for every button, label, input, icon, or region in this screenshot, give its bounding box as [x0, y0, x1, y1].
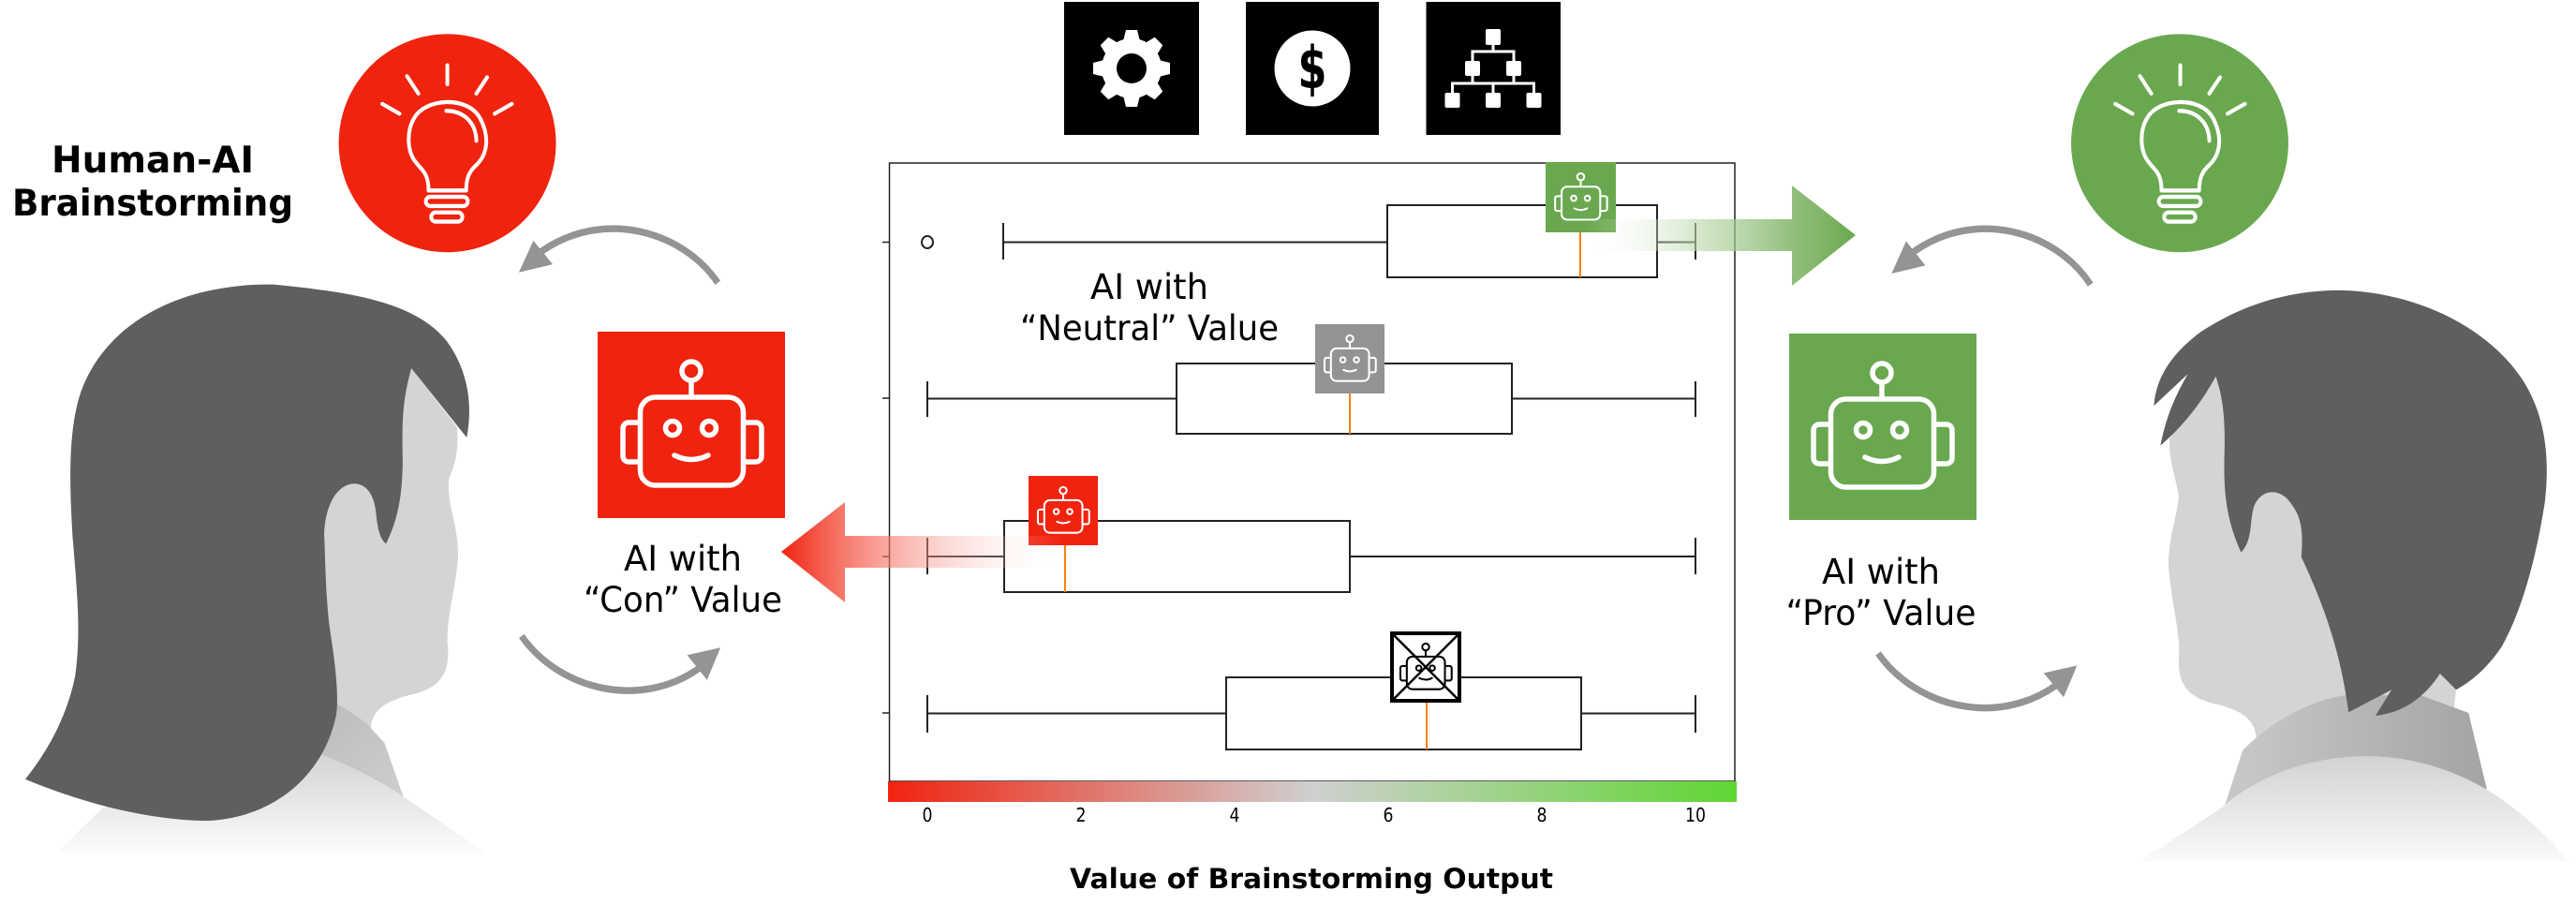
x-axis tick labels: 2 — [1075, 804, 1087, 826]
x-axis tick labels: 6 — [1383, 804, 1394, 826]
icon: small green robot — [1546, 162, 1616, 232]
boxplot: con AI — [927, 521, 1695, 592]
chart frame — [890, 163, 1735, 781]
title: Brainstorming — [12, 183, 293, 225]
label: AI with Con value: “Con” Value — [584, 580, 782, 620]
y-axis ticks — [882, 242, 889, 713]
red idea lightbulb — [339, 34, 556, 252]
x-axis tick labels: 8 — [1536, 804, 1547, 826]
x-axis tick labels: 0 — [922, 804, 933, 826]
arrow: left human to AI — [522, 636, 720, 690]
x-axis tick labels: 10 — [1685, 804, 1706, 826]
label: AI with Pro value — [1785, 552, 1976, 633]
right human figure — [2140, 290, 2569, 861]
label: AI with Pro value: “Pro” Value — [1785, 593, 1976, 633]
icon: dollar: $ — [1298, 34, 1326, 102]
left human figure — [25, 285, 486, 853]
boxplot: neutral AI — [927, 363, 1695, 434]
title — [12, 140, 293, 225]
icon: small grey robot — [1315, 324, 1384, 393]
arrow: shift to negative value — [781, 502, 1065, 602]
icon: hierarchy — [1426, 2, 1561, 135]
boxplot: pro AI — [922, 205, 1695, 277]
x-axis title: Value of Brainstorming Output — [1070, 863, 1553, 896]
icon: green pro-value robot — [1789, 334, 1976, 520]
colour scale bar — [888, 781, 1737, 802]
x-axis tick labels: 4 — [1229, 804, 1240, 826]
icon: gear — [1064, 2, 1199, 135]
arrow: right AI to idea — [1891, 229, 2091, 285]
box plot chart — [882, 163, 1737, 826]
icon: crossed-out robot — [1392, 633, 1459, 701]
label: AI with Con value — [584, 539, 782, 620]
label: AI with Neutral value — [1020, 267, 1279, 349]
green idea lightbulb — [2071, 34, 2288, 252]
label: AI with Neutral value: AI with — [1090, 267, 1208, 307]
label: AI with Con value: AI with — [624, 539, 742, 579]
icon: small red robot — [1029, 476, 1098, 545]
label: AI with Neutral value: “Neutral” Value — [1020, 308, 1279, 349]
arrow: shift to positive value — [1586, 185, 1856, 286]
boxplot: no AI — [927, 677, 1695, 749]
icon: red con-value robot — [598, 332, 785, 518]
title: Human-AI — [52, 140, 254, 182]
icon: dollar — [1246, 2, 1379, 135]
arrow: left AI to idea — [519, 229, 718, 283]
x-axis tick labels — [922, 804, 1706, 826]
label: AI with Pro value: AI with — [1822, 552, 1940, 592]
arrow: AI to right human — [1878, 653, 2077, 708]
